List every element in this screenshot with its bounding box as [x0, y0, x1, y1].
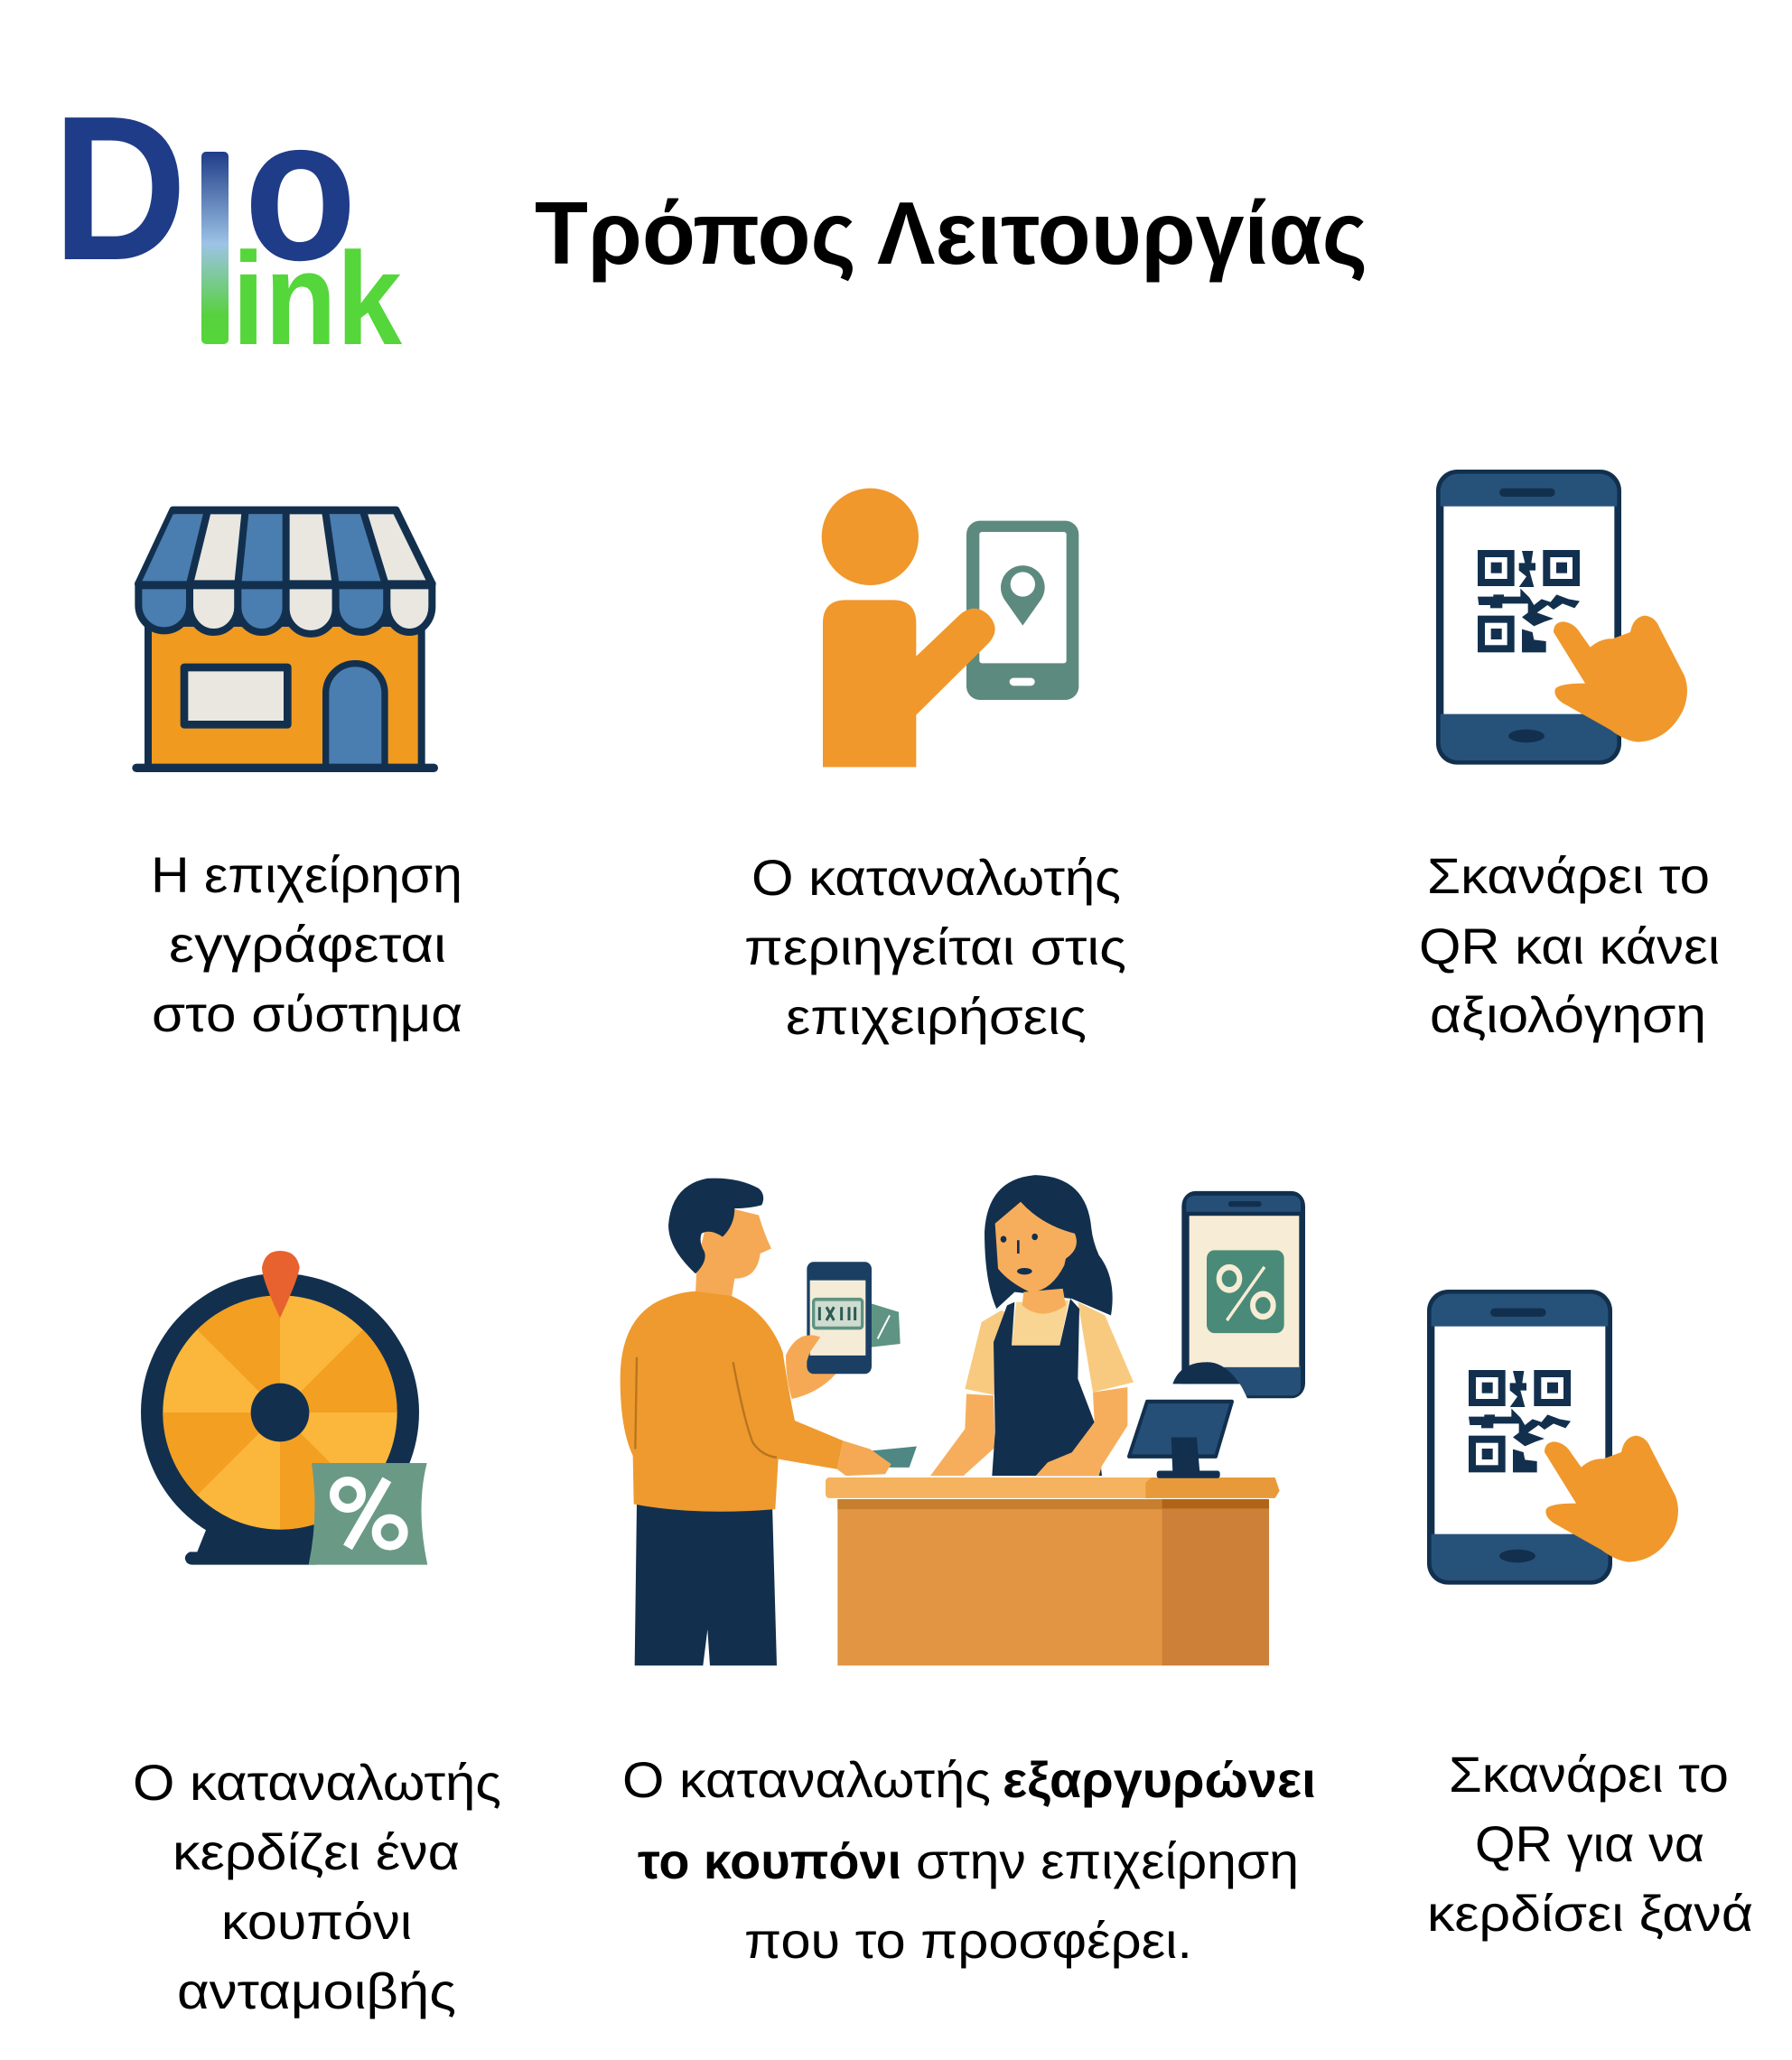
text: step 4: Ο καταναλωτής	[133, 1754, 501, 1811]
shopkeeper, phone poster and terminal	[930, 1175, 1305, 1478]
text: step 1: στο σύστημα	[152, 985, 462, 1042]
text: step 4: ανταμοιβής	[177, 1962, 456, 2019]
text: step 5: Ο καταναλωτής	[622, 1751, 991, 1808]
text: step 4	[133, 1754, 501, 2019]
text: step 2: Ο καταναλωτής	[751, 849, 1121, 906]
icon: phone with QR code and hand (repeat)	[1427, 1290, 1678, 1585]
text: step 4: κερδίζει ένα	[173, 1823, 460, 1880]
text: step 6	[1427, 1746, 1753, 1942]
text: step 5: στην επιχείρηση	[916, 1832, 1299, 1889]
logo: Dio link	[52, 74, 403, 372]
text: step 5: εξαργυρώνει	[1003, 1751, 1316, 1808]
text: step 6: Σκανάρει το	[1449, 1746, 1729, 1803]
text: step 4: κουπόνι	[221, 1893, 412, 1950]
text: step 2	[744, 849, 1126, 1045]
title: Τρόπος Λειτουργίας	[535, 183, 1367, 283]
icon: storefront	[136, 510, 434, 768]
text: step 3	[1419, 847, 1720, 1043]
text: step 3: QR και κάνει	[1419, 918, 1720, 974]
logo: Dio link: ink	[232, 225, 403, 372]
counter	[826, 1477, 1280, 1665]
text: step 3: Σκανάρει το	[1427, 847, 1710, 904]
text: step 5: το κουπόνι	[638, 1832, 901, 1889]
text: step 2: περιηγείται στις	[744, 918, 1126, 975]
text: step 2: επιχειρήσεις	[786, 988, 1087, 1045]
logo: Dio link: D	[52, 74, 187, 303]
text: step 1: εγγράφεται	[169, 916, 446, 973]
text: step 1	[151, 846, 462, 1042]
logo: Dio link: o	[244, 75, 357, 303]
icon: phone with QR code and hand	[1436, 470, 1687, 765]
text: step 1: Η επιχείρηση	[151, 846, 462, 903]
text: step 5: που το προσφέρει.	[744, 1912, 1192, 1969]
icon: person with tablet and map pin	[822, 489, 1078, 767]
text: step 6: κερδίσει ξανά	[1427, 1885, 1753, 1942]
text: step 6: QR για να	[1475, 1815, 1704, 1872]
text: step 5	[622, 1751, 1316, 1969]
illustration: customer redeeming coupon at shop counter	[621, 1175, 1305, 1665]
text: step 3: αξιολόγηση	[1430, 986, 1706, 1043]
icon: prize wheel with coupon	[141, 1251, 427, 1565]
customer	[621, 1179, 917, 1665]
